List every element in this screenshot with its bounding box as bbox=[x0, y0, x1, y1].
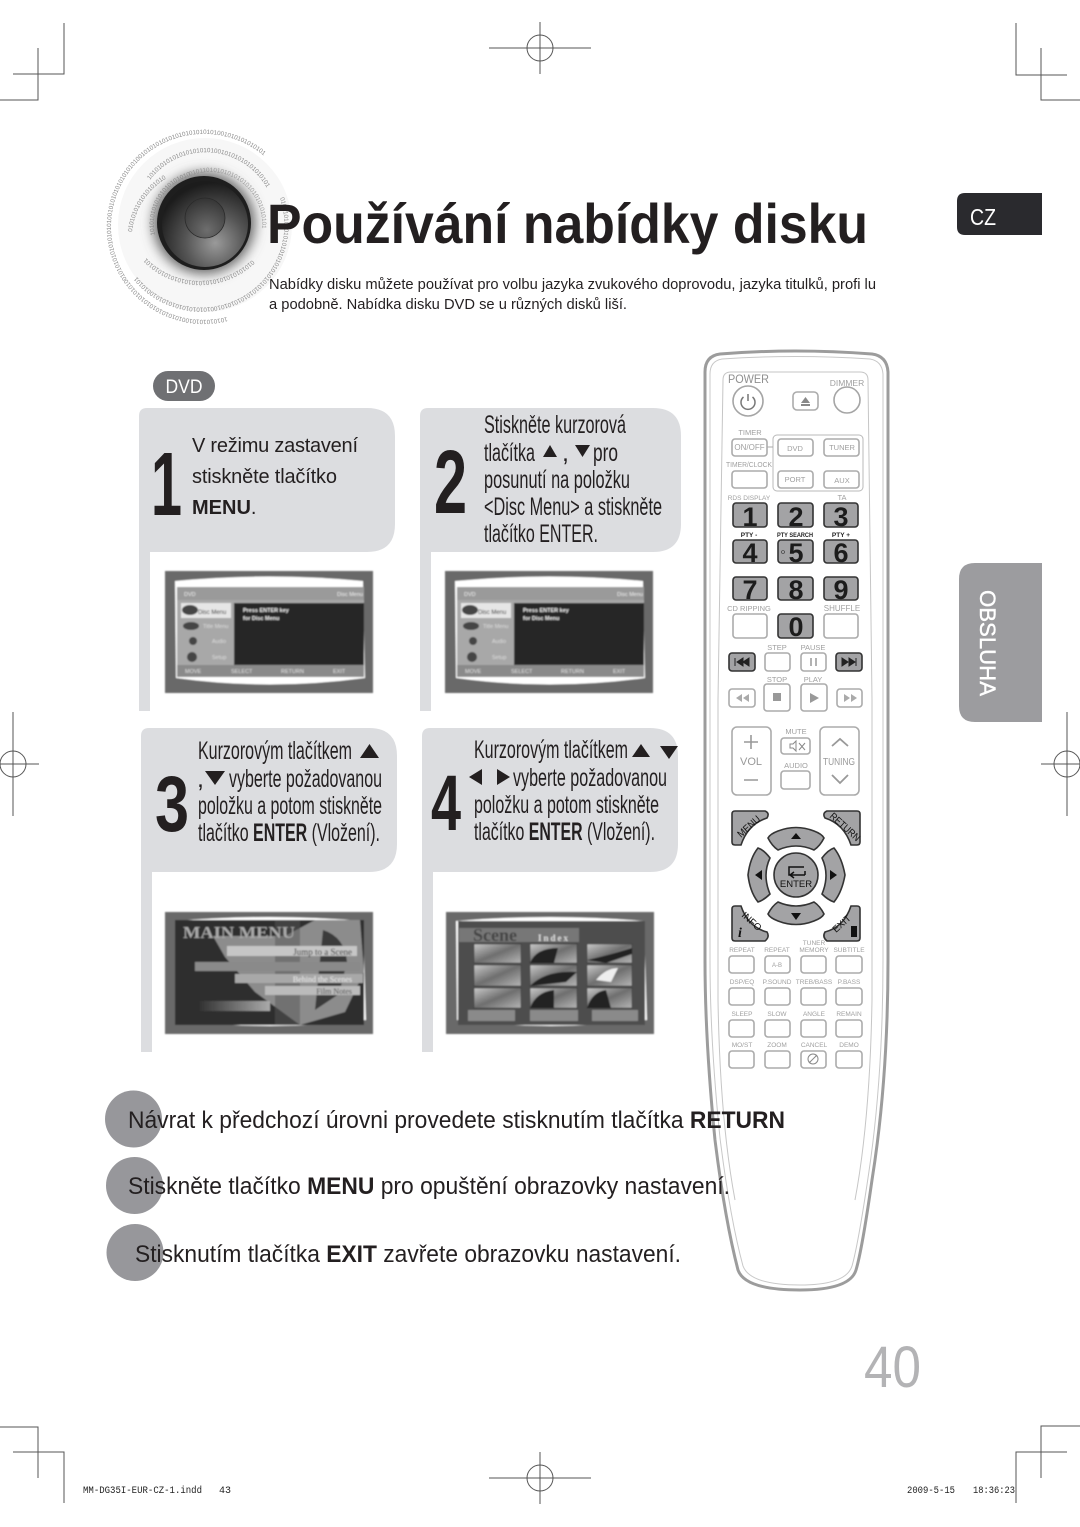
panel: step 4: 4 bbox=[431, 760, 461, 848]
screenshot: disc menu, step 1: Disc Menu bbox=[198, 610, 226, 616]
screenshot: disc menu, step 2: DVD bbox=[464, 592, 476, 598]
function buttons: SLOW bbox=[767, 1011, 787, 1018]
remote control bbox=[705, 351, 888, 1290]
panel: step 3 bbox=[141, 728, 397, 1052]
footer: print slug: 18:36:23 bbox=[973, 1486, 1015, 1497]
bullet 1 bbox=[105, 1090, 785, 1148]
function buttons: DSP/EQ bbox=[730, 979, 754, 986]
panel: step 4 bbox=[422, 728, 678, 1052]
info button: i bbox=[738, 926, 742, 941]
function buttons bbox=[729, 940, 865, 1068]
screenshot: disc menu, step 1: for Disc Menu bbox=[243, 616, 279, 622]
icon: speaker with binary rings: 1010101010101010101010010101010101010101 bbox=[148, 148, 270, 188]
number keypad: 8 bbox=[788, 575, 804, 605]
screenshot: disc menu, step 1: Press ENTER key bbox=[243, 608, 290, 614]
panel: step 2: 2 bbox=[434, 433, 467, 533]
language tab: CZ bbox=[957, 193, 1042, 235]
source selection buttons: TIMER/CLOCK bbox=[726, 460, 772, 469]
intro text bbox=[269, 276, 876, 313]
screenshot: disc menu, step 1: Disc Menu bbox=[337, 592, 363, 598]
language tab: CZ: CZ bbox=[970, 204, 996, 230]
function buttons: A-B bbox=[772, 963, 782, 969]
remote body bbox=[705, 351, 888, 1290]
panel: step 4: Kurzorovým tlačítkem bbox=[474, 736, 628, 764]
panel: step 3: 3 bbox=[155, 759, 189, 848]
intro text: Nabídky disku můžete používat pro volbu jazyka zvukového doprovodu, jazyka titulků, profi lu bbox=[269, 276, 876, 293]
screenshot: main menu, step 3: Jump to a Scene bbox=[293, 947, 352, 957]
panel: step 1: 1 bbox=[151, 433, 182, 534]
function buttons: TREB/BASS bbox=[796, 979, 833, 986]
screenshot: disc menu, step 1: Audio bbox=[212, 639, 226, 645]
screenshot: disc menu, step 2: RETURN bbox=[561, 669, 584, 675]
number keypad: RDS DISPLAY bbox=[728, 495, 771, 502]
source selection buttons: DVD bbox=[787, 444, 803, 453]
screenshot: disc menu, step 1: RETURN bbox=[281, 669, 304, 675]
panel: step 2: posunutí na položku bbox=[484, 466, 630, 494]
screenshot: disc menu, step 2: Press ENTER key bbox=[523, 608, 570, 614]
transport buttons: PLAY bbox=[804, 675, 822, 684]
panel: step 4: vyberte požadovanou bbox=[513, 764, 667, 792]
panel: step 3: položku a potom stiskněte bbox=[198, 792, 382, 820]
function buttons: MO/ST bbox=[732, 1042, 752, 1049]
icon: speaker with binary rings: 01010101010101010101010101010101010101010101010 bbox=[144, 258, 254, 286]
screenshot: scene index, step 4: Scene bbox=[473, 925, 517, 945]
panel: step 2: tlačítka bbox=[484, 439, 535, 467]
panel: step 2: <Disc Menu> a stiskněte bbox=[484, 493, 662, 521]
volume, mute, tuning: VOL bbox=[740, 756, 762, 768]
panel: step 1: MENU. bbox=[192, 497, 256, 519]
icon: speaker with binary rings: 1010101010100101010101010101010100101010101010101010010101010101010101001010101010101010101010100101010101010101010101001010101010101010101010100101010101010101010101010101011 bbox=[106, 130, 266, 324]
source selection buttons: ON/OFF bbox=[734, 443, 765, 452]
function buttons: REPEAT bbox=[729, 947, 755, 954]
number keypad: 2 bbox=[788, 502, 804, 532]
info button: INFO bbox=[739, 910, 763, 934]
footer: print slug: 43 bbox=[219, 1486, 231, 1497]
screenshot: main menu, step 3: Film Notes bbox=[316, 987, 352, 996]
number keypad: PTY - bbox=[741, 532, 757, 539]
function buttons: CANCEL bbox=[801, 1042, 828, 1049]
screenshot: disc menu, step 1: EXIT bbox=[333, 669, 346, 675]
arrow keys bbox=[748, 828, 845, 924]
screenshot: disc menu, step 2: Title Menu bbox=[483, 624, 508, 630]
panel: step 1: stiskněte tlačítko bbox=[192, 466, 337, 488]
power section: DIMMER bbox=[830, 378, 864, 388]
power section bbox=[728, 374, 864, 416]
function buttons: P.SOUND bbox=[763, 979, 792, 986]
volume, mute, tuning: MUTE bbox=[785, 727, 807, 736]
screenshot: disc menu, step 2: Disc Menu bbox=[478, 610, 506, 616]
panel: step 2: tlačítko ENTER. bbox=[484, 520, 598, 548]
title: Používání nabídky disku bbox=[267, 192, 868, 255]
enter button: ENTER bbox=[780, 879, 812, 890]
panel: step 3: tlačítko ENTER (Vložení). bbox=[198, 819, 380, 847]
function buttons: REPEAT bbox=[764, 947, 790, 954]
function buttons: DEMO bbox=[839, 1042, 859, 1049]
screenshot: disc menu, step 1: SELECT bbox=[231, 669, 253, 675]
footer: print slug bbox=[83, 1485, 1015, 1497]
function buttons: SLEEP bbox=[732, 1011, 752, 1018]
transport buttons: STEP bbox=[767, 643, 787, 652]
number keypad: 9 bbox=[833, 575, 849, 605]
bullet 2 bbox=[106, 1157, 730, 1214]
panel: step 2 bbox=[420, 408, 681, 711]
bullet 3: Stisknutím tlačítka EXIT zavřete obrazovku nastavení. bbox=[135, 1241, 681, 1268]
panel: step 2: Stiskněte kurzorová bbox=[484, 411, 626, 439]
intro text: a podobně. Nabídka disku DVD se u různých disků liší. bbox=[269, 296, 627, 313]
function buttons: TUNER bbox=[803, 940, 825, 947]
screenshot: disc menu, step 1: Setup bbox=[212, 655, 226, 661]
transport buttons: PAUSE bbox=[801, 643, 825, 652]
footer: print slug: MM-DG35I-EUR-CZ-1.indd bbox=[83, 1485, 202, 1497]
page number: 40 bbox=[864, 1335, 921, 1400]
navigation pad bbox=[732, 811, 862, 941]
number keypad: 3 bbox=[833, 502, 849, 532]
screenshot: disc menu, step 2: Setup bbox=[492, 655, 506, 661]
function buttons: ANGLE bbox=[803, 1011, 826, 1018]
source selection buttons: AUX bbox=[834, 476, 850, 485]
panel: step 2: , bbox=[562, 439, 569, 467]
source selection buttons: TUNER bbox=[829, 443, 855, 452]
volume, mute, tuning bbox=[732, 727, 859, 795]
volume, mute, tuning: AUDIO bbox=[784, 761, 808, 770]
menu button: MENU bbox=[736, 814, 763, 840]
bullet 1: Návrat k předchozí úrovni provedete stisknutím tlačítka RETURN bbox=[128, 1107, 785, 1134]
panel: step 4: tlačítko ENTER (Vložení). bbox=[474, 818, 655, 846]
source selection buttons: TIMER bbox=[738, 428, 762, 437]
function buttons: P.BASS bbox=[838, 979, 861, 986]
screenshot: disc menu, step 1: DVD bbox=[184, 592, 196, 598]
source selection buttons bbox=[726, 428, 863, 491]
screenshot: scene index, step 4 bbox=[446, 912, 654, 1034]
icon: speaker with binary rings bbox=[106, 130, 289, 324]
source selection buttons: PORT bbox=[785, 475, 806, 484]
volume, mute, tuning: TUNING bbox=[823, 756, 855, 768]
screenshot: disc menu, step 1: Title Menu bbox=[203, 624, 228, 630]
DVD badge bbox=[153, 371, 215, 401]
screenshot: disc menu, step 1 bbox=[165, 571, 373, 693]
screenshot: disc menu, step 1: MOVE bbox=[185, 669, 202, 675]
icon: speaker with binary rings: 0101101010101010101010101010101010101 bbox=[189, 168, 266, 228]
panel: step 1: V režimu zastavení bbox=[192, 435, 358, 457]
screenshot: main menu, step 3 bbox=[165, 912, 373, 1034]
function buttons: REMAIN bbox=[836, 1011, 862, 1018]
footer: print slug: 2009-5-15 bbox=[907, 1486, 955, 1497]
bullet 2: Stiskněte tlačítko MENU pro opuštění obrazovky nastavení. bbox=[128, 1173, 730, 1200]
section tab: OBSLUHA bbox=[959, 563, 1042, 722]
section tab: OBSLUHA: OBSLUHA bbox=[975, 590, 1000, 696]
function buttons: ZOOM bbox=[767, 1042, 787, 1049]
screenshot: disc menu, step 2: Audio bbox=[492, 639, 506, 645]
panel: step 3: vyberte požadovanou bbox=[229, 765, 382, 793]
screenshot: disc menu, step 2 bbox=[445, 571, 653, 693]
number keypad: TA bbox=[837, 493, 847, 502]
screenshot: disc menu, step 2: EXIT bbox=[613, 669, 626, 675]
screenshot: disc menu, step 2: MOVE bbox=[465, 669, 482, 675]
transport buttons bbox=[729, 643, 862, 711]
number keypad: 1 bbox=[742, 502, 758, 532]
icon: speaker with binary rings: 0100101010101010101010101010101010101010100101010101010101010010101010101010101010100101010101010101010101010101010101010101010101 bbox=[134, 197, 289, 312]
panel: step 3: Kurzorovým tlačítkem bbox=[198, 737, 352, 765]
screenshot: scene index, step 4: Index bbox=[538, 933, 570, 943]
panel: step 4: položku a potom stiskněte bbox=[474, 791, 659, 819]
number keypad: PTY + bbox=[832, 532, 850, 539]
number keypad: 5 bbox=[788, 538, 804, 568]
screenshot: disc menu, step 2: for Disc Menu bbox=[523, 616, 559, 622]
number keypad: CD RIPPING bbox=[727, 604, 771, 613]
screenshot: main menu, step 3: MAIN MENU bbox=[183, 923, 295, 942]
number keypad bbox=[727, 493, 860, 642]
number keypad: SHUFFLE bbox=[824, 604, 860, 613]
transport buttons: STOP bbox=[767, 675, 787, 684]
screenshot: main menu, step 3: Behind the Scenes bbox=[293, 975, 352, 984]
number keypad: 7 bbox=[742, 575, 758, 605]
number keypad: 6 bbox=[833, 538, 849, 568]
function buttons: MEMORY bbox=[799, 947, 829, 954]
screenshot: disc menu, step 2: SELECT bbox=[511, 669, 533, 675]
exit button: EXIT bbox=[831, 913, 854, 935]
icon: speaker with binary rings: 101010101010101010101011 bbox=[150, 172, 190, 235]
panel: step 3: , bbox=[197, 765, 204, 793]
number keypad: 4 bbox=[742, 538, 758, 568]
return button: RETURN bbox=[827, 811, 862, 844]
info button bbox=[732, 906, 768, 941]
DVD badge: DVD bbox=[166, 377, 202, 398]
number keypad: PTY SEARCH bbox=[777, 532, 813, 539]
panel: step 1 bbox=[139, 408, 395, 711]
number keypad: 0 bbox=[788, 612, 804, 642]
screenshot: disc menu, step 2: Disc Menu bbox=[617, 592, 643, 598]
bullet 3 bbox=[106, 1224, 681, 1281]
function buttons: SUBTITLE bbox=[833, 947, 865, 954]
power section: POWER bbox=[728, 374, 769, 386]
panel: step 2: pro bbox=[593, 439, 618, 467]
